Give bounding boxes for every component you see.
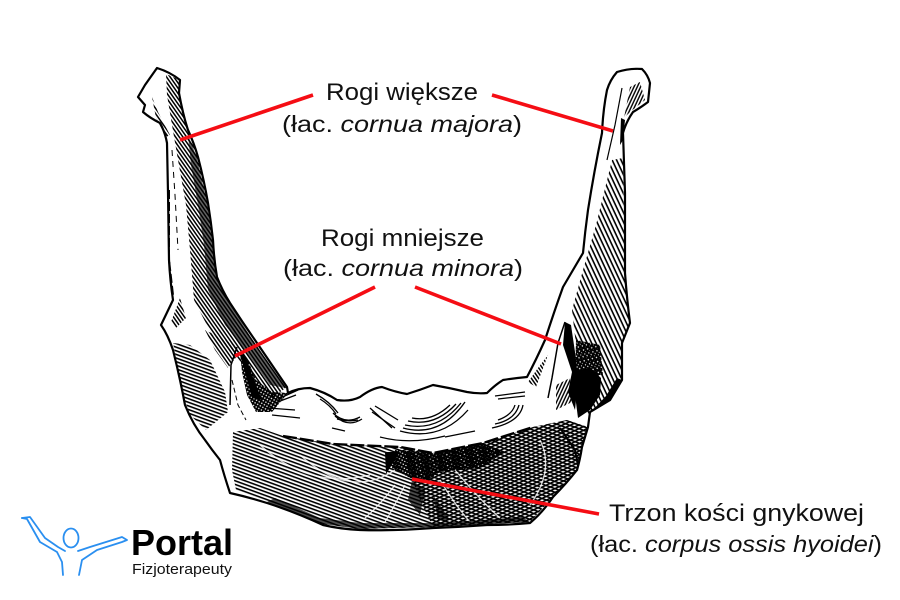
wordmark: Portal bbox=[131, 522, 233, 563]
leader line: greater horn left bbox=[180, 95, 313, 140]
label: greater horns: Rogi większe bbox=[326, 79, 478, 106]
label: lesser horns bbox=[283, 225, 523, 281]
tagline: Fizjoterapeuty bbox=[132, 561, 233, 578]
label: body of hyoid bone: Trzon kości gnykowej bbox=[609, 500, 864, 527]
white curved highlights bbox=[260, 440, 546, 522]
label: body of hyoid bone: (łac. corpus ossis hyoidei ) bbox=[590, 531, 882, 557]
body of hyoid: upper surface details bbox=[268, 390, 525, 441]
left greater horn shading bbox=[152, 74, 287, 398]
body of hyoid: hatched front face bbox=[232, 420, 588, 529]
label: greater horns bbox=[282, 79, 522, 137]
label: lesser horns: (łac. cornua minora ) bbox=[283, 255, 523, 281]
leader line: lesser horn right bbox=[415, 287, 561, 344]
logo: Portal Fizjoterapeuty bbox=[22, 517, 233, 578]
label: lesser horns: Rogi mniejsze bbox=[321, 225, 484, 252]
leader line: body of hyoid bbox=[412, 479, 599, 514]
leader line: greater horn right bbox=[492, 95, 613, 131]
bone outline bbox=[138, 68, 650, 530]
leader line: lesser horn left bbox=[235, 287, 375, 356]
right lesser horn bbox=[528, 322, 578, 410]
label: greater horns: (łac. cornua majora ) bbox=[282, 111, 522, 137]
icon: figure with raised arms bbox=[22, 517, 127, 575]
left lower horn region shading bbox=[173, 330, 240, 430]
illustration: hyoid bone bbox=[138, 68, 650, 530]
label: body of hyoid bone bbox=[590, 500, 882, 557]
right greater horn shading bbox=[572, 82, 645, 418]
left lesser horn bbox=[230, 347, 288, 420]
